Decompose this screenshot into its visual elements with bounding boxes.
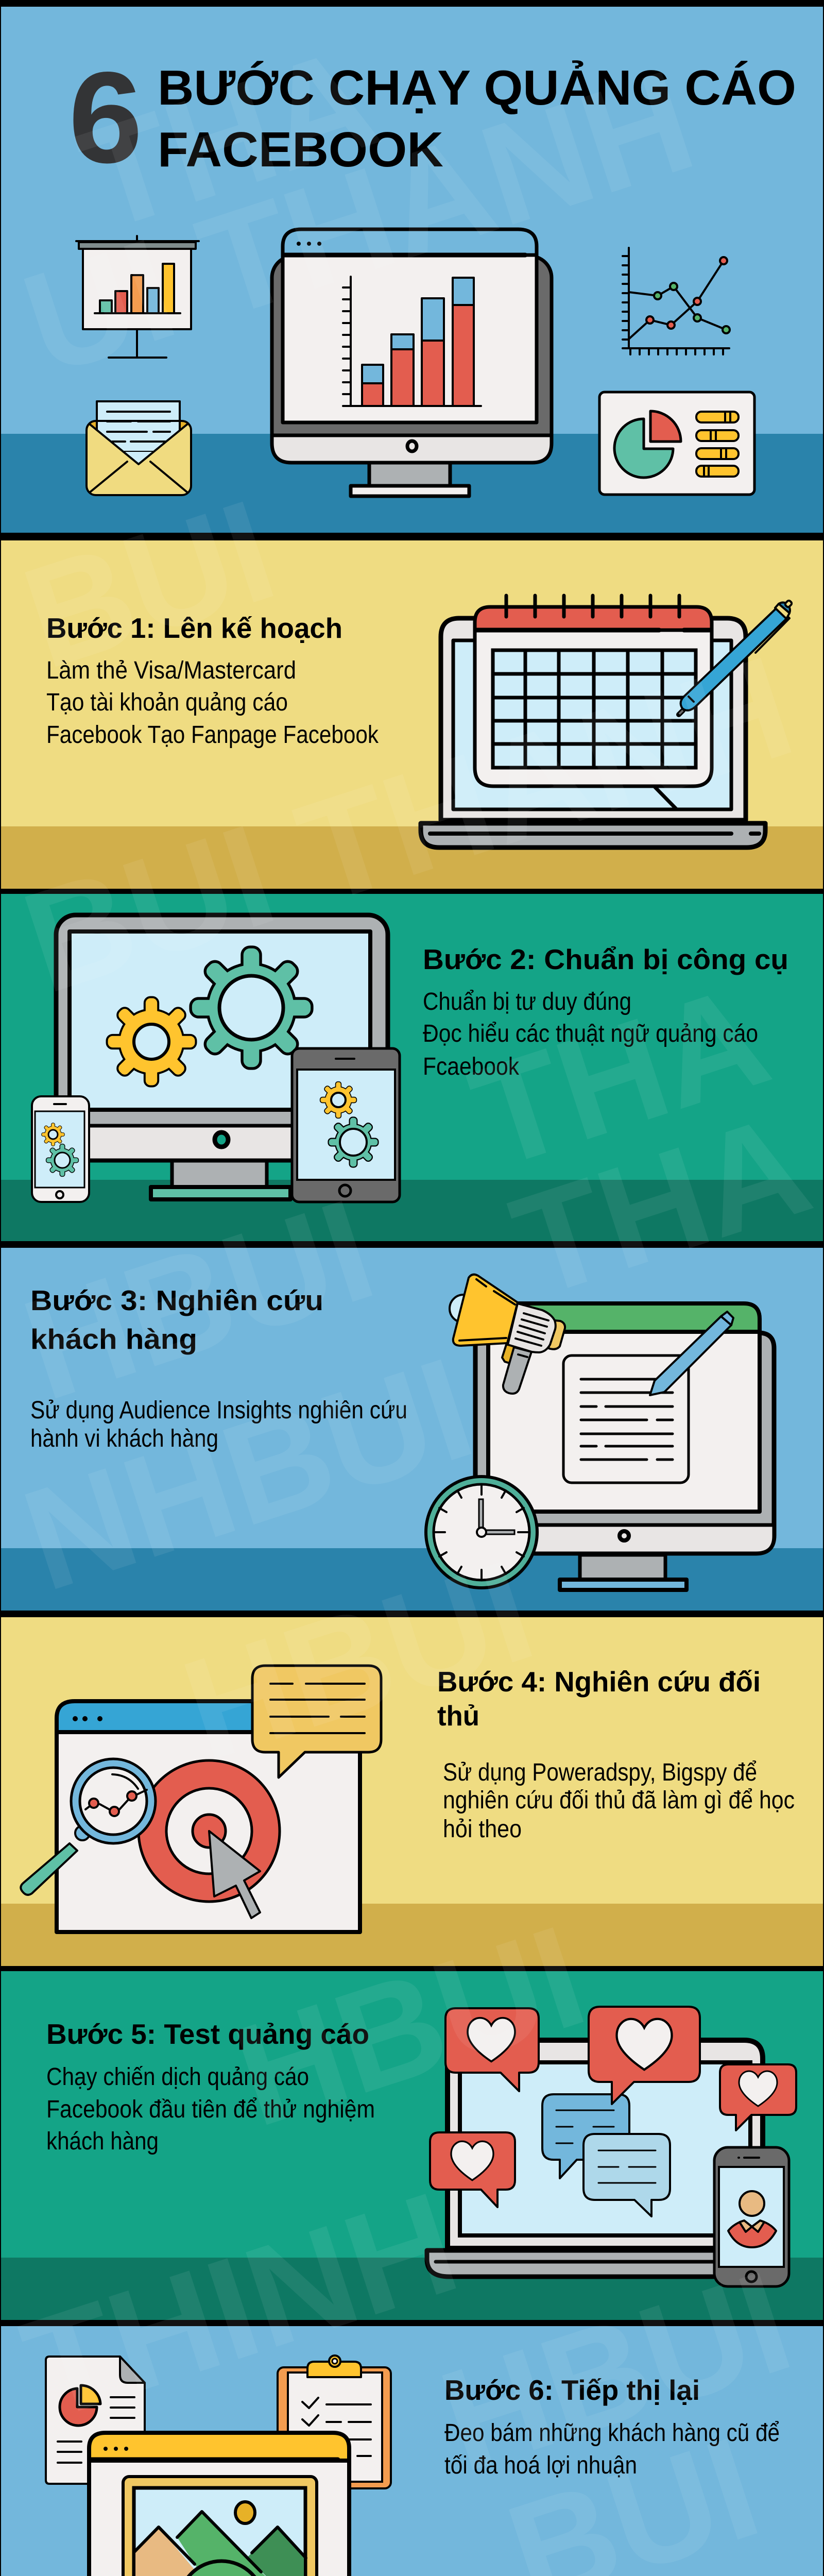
icon: chat bubble blue [542,2094,629,2178]
text block: step 6: Đeo bám những khách hàng cũ để [444,2419,780,2447]
heading: step 2: Bước 2: Chuẩn bị công cụ [423,943,788,975]
panel: step 5 [1,1971,823,2320]
icon: laptop [427,2040,763,2277]
watermark: THINH [6,2162,475,2451]
icon: speech bubble [252,1666,381,1777]
watermark: BUI THANH [6,625,810,1024]
icon: clock [426,1477,537,1588]
text block: step 5: Facebook đầu tiên để thử nghiệm [46,2096,375,2123]
icon: presentation board [76,236,199,358]
watermark: HBUI [6,1169,391,1431]
text block: step 4 [443,1759,795,1843]
panel: step 2 [1,894,823,1241]
watermark: BUI [6,469,292,699]
title [158,60,796,177]
heading: step 3: khách hàng [30,1323,197,1355]
icon: desktop monitor with bar chart [272,229,552,496]
icon: pie chart card [599,392,754,495]
icon: check badge [178,2561,265,2576]
watermark: THA [454,955,786,1199]
heading: step 5: Bước 5: Test quảng cáo [46,2018,369,2050]
text block: step 6: tối đa hoá lợi nhuận [444,2452,637,2479]
title: BƯỚC CHẠY QUẢNG CÁO [158,60,796,115]
title number: 6 [68,45,143,190]
watermark: HBUI [423,2241,808,2502]
text block: step 5: Chạy chiến dịch quảng cáo [46,2063,309,2091]
icon: target [139,1760,280,1902]
icon: browser window with target [21,1701,360,1932]
icon: arrow cursor [209,1831,260,1918]
panel: step 3 [1,1248,823,1611]
heading: step 4 [437,1666,761,1732]
icon: smartphone with avatar [714,2147,789,2286]
icon: smartphone with gears [32,1096,89,1202]
text block: step 2 [423,988,758,1080]
icon: tablet with gears [292,1048,400,1202]
icon: laptop with calendar [421,596,793,848]
text block: step 6 [444,2419,780,2479]
heading: step 6: Bước 6: Tiếp thị lại [444,2374,700,2406]
panel: step 1 [1,540,823,889]
icon: report document [46,2357,145,2484]
watermark: HBUI [166,1530,551,1791]
icon: heart bubble C [720,2064,796,2130]
icon: desktop monitor with gears [56,915,388,1199]
title: FACEBOOK [158,122,443,177]
panel: step 6 [1,2326,823,2576]
heading: step 1: Bước 1: Lên kế hoạch [46,612,342,644]
text block: step 2: Đọc hiểu các thuật ngữ quảng cáo [423,1020,758,1047]
text block: step 1: Tạo tài khoản quảng cáo [46,689,288,716]
icon: desktop monitor with document [475,1303,774,1590]
text block: step 3: hành vi khách hàng [30,1425,218,1452]
icon: megaphone [450,1275,565,1394]
text block: step 5: khách hàng [46,2128,159,2155]
icon: browser window with picture [89,2433,349,2576]
heading: step 3 [30,1284,323,1355]
watermark: THA [63,17,394,261]
icon: line chart [623,248,730,354]
panel: step 4 [1,1617,823,1966]
text block: step 2: Chuẩn bị tư duy đúng [423,988,631,1015]
icon: clipboard [278,2355,391,2488]
text block: step 2: Fcaebook [423,1053,520,1080]
text block: step 1: Làm thẻ Visa/Mastercard [46,657,296,684]
icon: heart bubble D [430,2132,515,2207]
icon: envelope [87,401,191,495]
heading: step 4: Bước 4: Nghiên cứu đối [437,1666,761,1698]
watermark: THA [495,1083,824,1328]
text block: step 3 [30,1397,407,1452]
text block: step 1 [46,657,379,749]
watermark: HBUI [217,1895,602,2157]
watermark: NHBUI [6,1327,490,1621]
icon: landscape picture [134,2502,306,2576]
text block: step 1: Facebook Tạo Fanpage Facebook [46,721,379,749]
text block: step 4: hỏi theo [443,1816,522,1843]
text block: step 5 [46,2063,375,2155]
heading: step 3: Bước 3: Nghiên cứu [30,1284,323,1316]
text block: step 3: Sử dụng Audience Insights nghiên cứu [30,1397,407,1424]
icon: pen [679,600,793,715]
icon: chat bubble light [583,2134,670,2216]
icon: magnifier [21,1759,156,1895]
icon: heart bubble A [445,2008,539,2091]
watermark: UI THANH [6,40,711,405]
heading: step 4: thủ [437,1700,479,1732]
text block: step 4: Sử dụng Poweradspy, Bigspy để [443,1759,757,1786]
panel: header [1,7,823,533]
icon: heart bubble B [589,2007,700,2104]
